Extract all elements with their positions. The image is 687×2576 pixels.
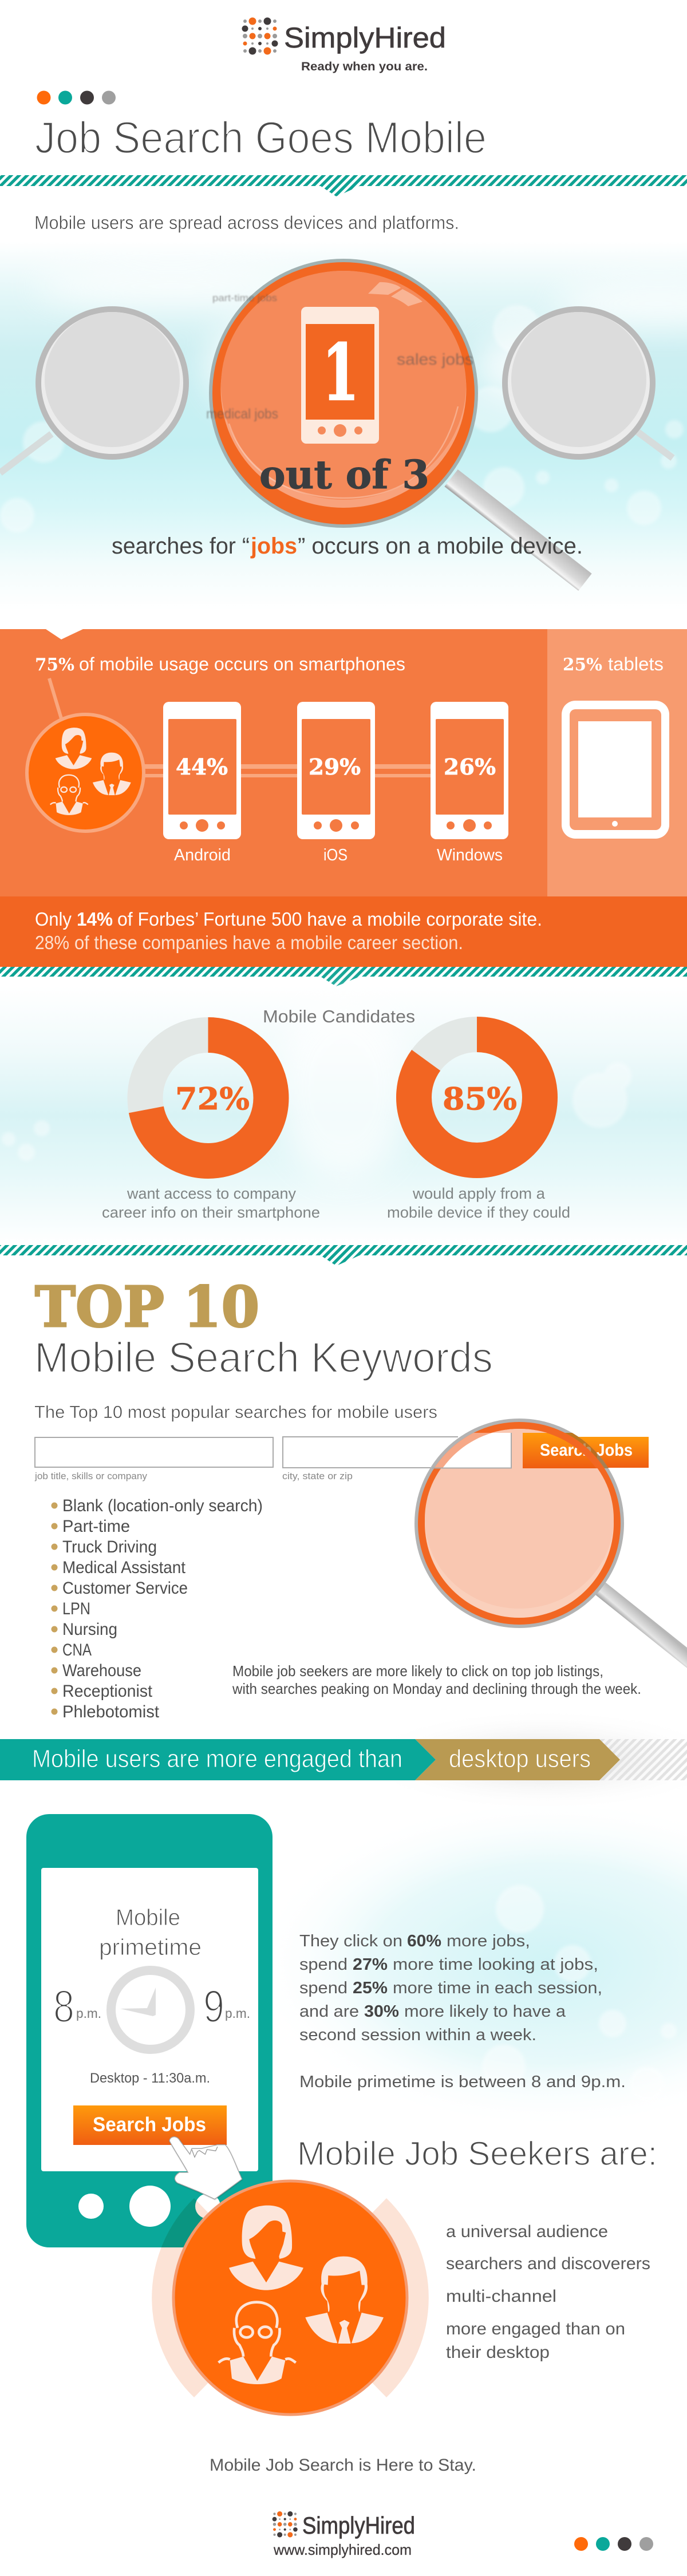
button: search jobs base [523,1437,649,1468]
panel: device usage [0,629,687,896]
text: engagement stats: 27% [353,1955,388,1974]
times: p.m. [76,2006,101,2021]
input: job title: job title, skills or company [34,1471,148,1481]
heading: mobile primetime [99,1905,202,1960]
magnifier: centre lens [209,259,478,528]
icon: logo dot matrix [242,17,278,55]
text: engagement stats: more jobs, [447,1932,530,1950]
list: top 10 keywords: Customer Service [62,1579,188,1598]
icon: iOS phone [297,702,375,839]
list: top 10 keywords: Blank (location-only search) [62,1496,263,1515]
text: engagement stats: 60% [407,1932,441,1950]
icon: teal phone [26,1814,273,2247]
phone screen [41,1868,258,2171]
text: engagement stats: more time in each session, [393,1979,602,1997]
list: top 10 keywords: Medical Assistant [62,1558,186,1577]
list: job seeker traits: searchers and discoverers [446,2254,650,2273]
list: top 10 keywords: Warehouse [62,1661,141,1680]
icon: people circle large [173,2181,407,2415]
icon: phone with 1 [301,307,379,444]
chart: donut 72 percent [145,1035,271,1161]
list: top 10 keywords: Phlebotomist [62,1702,160,1721]
chart: donut 72 percent: 72% [175,1081,250,1117]
text: engagement stats: second session within a week. [299,2026,536,2044]
button: search jobs [73,2105,227,2145]
text: engagement stats: spend [299,1979,348,1997]
caption: searches for jobs: jobs [250,534,297,559]
background: cyan bokeh band [0,241,687,610]
text: 14 percent: Only [35,908,72,930]
text: engagement stats: spend [299,1955,348,1974]
text: click behaviour: Mobile job seekers are more likely to click on top job listings, [232,1662,603,1680]
lens view of input field [432,1433,512,1469]
blurred keywords: medical jobs [206,406,278,422]
heading: TOP 10: TOP 10 [35,1274,259,1340]
logo wordmark: SimplyHired [284,22,446,54]
icon: iOS phone: 29% [309,754,361,780]
heading: mobile job seekers: Mobile Job Seekers are: [297,2135,657,2172]
phone buttons [78,2186,220,2227]
list: job seeker traits: more engaged than on [446,2320,625,2338]
list: job seeker traits: a universal audience [446,2222,608,2241]
banner: mobile vs desktop [0,1739,687,1780]
platform labels: Android [174,846,231,864]
stat: out of 3: out of 3 [259,452,429,498]
decorative arcs: people circle [152,2198,429,2397]
banner: mobile vs desktop: desktop users [449,1745,591,1773]
list: top 10 keywords: LPN [62,1599,90,1618]
list: top 10 keywords: Receptionist [62,1682,153,1701]
chart: donut 85 percent: 85% [443,1081,517,1117]
icon: woman [229,2206,303,2290]
icon: Android phone: 44% [176,754,228,780]
times: p.m. [225,2006,250,2021]
heading: 25 percent tablets: tablets [608,654,664,674]
times: 8 [53,1981,74,2032]
logo: footer [273,2511,415,2558]
caption: 72 percent [102,1185,320,1221]
list: top 10 keywords: Nursing [62,1620,117,1639]
icon: older person with glasses [219,2302,296,2384]
text: engagement stats [299,1932,626,2091]
heading: 75 percent: 75% [35,655,74,675]
panel: smartphones [0,629,547,896]
text: engagement stats: 30% [364,2002,399,2021]
text: engagement stats: more time looking at jobs, [393,1955,598,1974]
banner: mobile vs desktop: Mobile users are more engaged than [32,1745,402,1773]
magnifier rim and lens [414,1419,624,1628]
text: 28 percent: of these companies have a mobile career section. [74,932,463,953]
input: location [282,1437,458,1481]
caption: searches for jobs: ” occurs on a mobile device. [298,534,583,559]
button: search jobs: Search Jobs [93,2113,206,2136]
background: cyan bokeh [0,986,687,1244]
colour dots [37,90,116,104]
magnifier handle [598,1587,687,1667]
times: 9 [203,1981,224,2032]
heading: 75 percent: of mobile usage occurs on smartphones [79,654,405,674]
caption: 72 percent: career info on their smartphone [102,1204,320,1221]
platform labels: Windows [437,846,503,864]
text: engagement stats: more likely to have a [404,2002,566,2021]
list: job seeker traits: multi-channel [446,2287,556,2306]
list: top 10 keywords: Part-time [62,1517,130,1536]
icon: Windows phone [431,702,508,839]
panel: tablets [547,629,687,896]
caption: searches for jobs: searches for “ [112,534,250,559]
text: 28 percent: 28% [35,932,69,953]
search form [34,1437,649,1481]
blurred keywords [206,293,473,422]
heading: 25 percent tablets [563,654,664,675]
input: location: city, state or zip [282,1471,353,1481]
lens view of search button: Search Jobs [540,1441,633,1460]
heading: Mobile Candidates [263,1006,415,1026]
icon: phone with 1: 1 [322,327,359,418]
panel: one out of three searches [0,241,687,610]
text: click behaviour: with searches peaking on Monday and declining through the week. [232,1680,641,1697]
times [53,1981,250,2032]
blurred keywords: part-time jobs [212,293,277,303]
icon: clock [111,1970,190,2049]
caption: 85 percent [387,1185,570,1221]
heading: mobile primetime: primetime [99,1935,202,1960]
lens view of search button [523,1433,632,1468]
list: job seeker traits: their desktop [446,2343,550,2362]
banner segment: desktop [415,1739,620,1780]
list: top 10 keywords: Truck Driving [62,1538,157,1556]
platform labels [174,846,503,864]
banner segment: mobile [0,1739,436,1780]
magnifier: right [502,306,673,460]
icon: Android phone [163,702,241,839]
input: job title [34,1437,273,1481]
closing statement: Mobile Job Search is Here to Stay. [210,2456,476,2475]
logo: SimplyHired header [242,17,446,73]
text: 14 percent: 14% [77,908,113,930]
caption: 85 percent: would apply from a [412,1185,546,1202]
colour dots: footer [574,2537,653,2551]
heading: mobile primetime: Mobile [116,1905,180,1930]
text: engagement stats: Mobile primetime is between 8 and 9p.m. [299,2073,626,2091]
text: engagement stats: They click on [299,1932,402,1950]
title: Job Search Goes Mobile [35,112,487,163]
caption: searches for jobs [112,534,583,559]
panel: mobile candidates [0,986,687,1244]
panel: Fortune 500 note [0,896,687,967]
list: job seeker traits [446,2222,650,2362]
text: desktop time: Desktop - 11:30a.m. [90,2071,210,2086]
heading: 25 percent tablets: 25% [563,655,602,675]
footer url: www.simplyhired.com [273,2541,412,2558]
platform labels: iOS [323,846,348,864]
subheading: Mobile users are spread across devices and platforms. [34,212,459,233]
caption: 85 percent: mobile device if they could [387,1204,570,1221]
text: click behaviour [232,1662,641,1697]
list: top 10 keywords: CNA [62,1641,92,1660]
icon: pointing hand [169,2137,242,2199]
list: top 10 keywords [52,1496,263,1721]
background: engagement section [252,1797,687,2129]
tagline: Ready when you are. [301,60,428,73]
heading: Mobile Search Keywords: Mobile Search Keywords [34,1334,493,1381]
magnifier: left [0,306,189,473]
icon: man with tie [305,2257,384,2344]
magnifier: top 10 [401,1419,687,1667]
caption: 72 percent: want access to company [127,1185,296,1202]
text: engagement stats: 25% [353,1979,388,1997]
icon: footer dot matrix [273,2511,298,2537]
footer wordmark: SimplyHired [302,2512,415,2539]
text: 14 percent: of Forbes’ Fortune 500 have a mobile corporate site. [117,908,542,930]
icon: Windows phone: 26% [444,754,496,780]
text: engagement stats: and are [299,2002,359,2021]
magnifier: centre handle [451,478,585,582]
subheading: top 10: The Top 10 most popular searches for mobile users [34,1402,437,1422]
icon: tablet [562,701,669,839]
chart: donut 85 percent [414,1034,540,1160]
blurred keywords: sales jobs [397,350,473,368]
icon: people circle [27,714,144,831]
